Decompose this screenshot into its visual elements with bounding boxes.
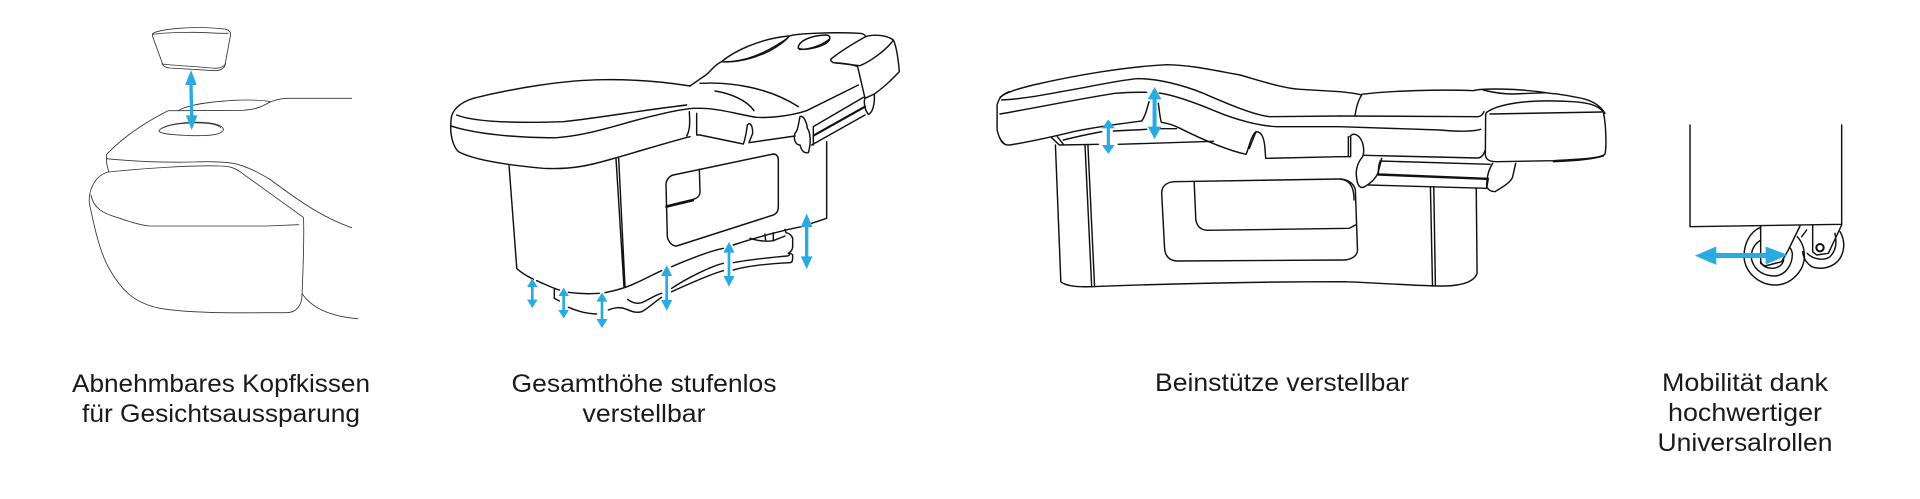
caption: castors: Mobilität dank: [1662, 369, 1829, 397]
illustration: treatment table side view: [997, 65, 1606, 287]
panel: castor mobility: [1658, 125, 1844, 457]
caption: leg rest: Beinstütze verstellbar: [1155, 369, 1409, 397]
panel: removable head pillow: [72, 28, 370, 428]
arrow: pillow up and down: [186, 71, 197, 129]
panel: adjustable leg rest: [997, 65, 1606, 397]
caption: height: Gesamthöhe stufenlos: [512, 370, 776, 398]
arrows: leg rest adjustment: [1103, 88, 1161, 153]
caption: pillow: Abnehmbares Kopfkissen: [72, 370, 370, 398]
panel: overall height adjustment: [451, 33, 899, 428]
arrows: height adjustment: [528, 214, 812, 327]
caption: height: [512, 370, 776, 428]
caption: castors: Universalrollen: [1658, 429, 1832, 457]
caption: castors: [1658, 369, 1832, 457]
caption: pillow: [72, 370, 370, 428]
arrow: horizontal movement: [1696, 247, 1787, 264]
illustration: treatment table three-quarter view: [451, 33, 899, 314]
caption: height: verstellbar: [582, 400, 706, 428]
caption: castors: hochwertiger: [1668, 399, 1822, 427]
illustration: castor wheels: [1690, 125, 1844, 285]
illustration: head cushion and pillow: [89, 28, 358, 319]
caption: pillow: für Gesichtsaussparung: [82, 400, 360, 428]
